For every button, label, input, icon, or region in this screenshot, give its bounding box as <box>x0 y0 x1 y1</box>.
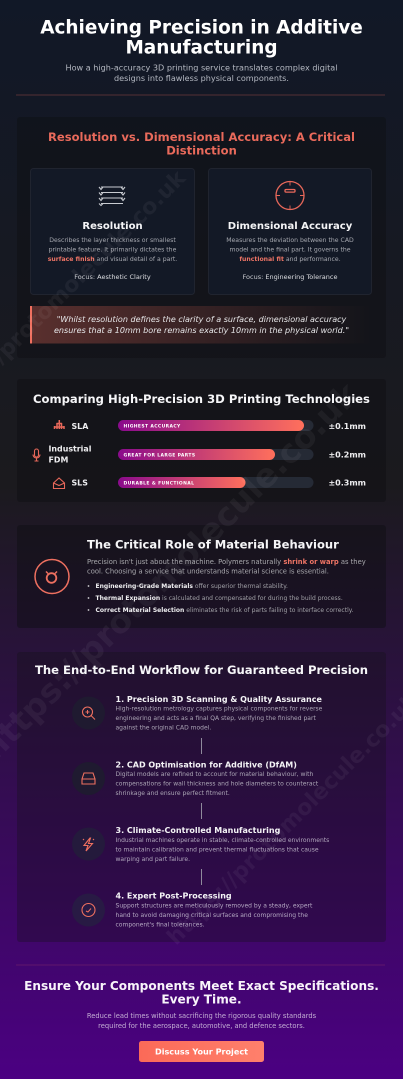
panel heading: Distinction <box>166 144 237 158</box>
icon: material ring <box>35 560 69 594</box>
step 4: component's final tolerances. <box>116 922 205 928</box>
focus label: Focus: Aesthetic Clarity <box>74 273 151 281</box>
panel: technology comparison <box>17 379 386 502</box>
row: SLA: HIGHEST ACCURACY <box>124 424 181 430</box>
panel: material behaviour <box>17 525 386 628</box>
step 2: compensations for wall thickness and hole diameters to counteract <box>116 780 319 788</box>
bullet list <box>88 583 353 614</box>
row: SLA <box>54 420 366 431</box>
row: SLA: SLA <box>72 422 89 431</box>
callout quote: "Whilst resolution defines the clarity of a surface, dimensional accuracy <box>57 315 346 324</box>
step 3: 3. Climate-Controlled Manufacturing <box>116 826 281 835</box>
CTA text: required for the aerospace, automotive, and defence sectors. <box>98 1022 305 1030</box>
icon: tray <box>72 762 105 795</box>
step 1: 1. Precision 3D Scanning & Quality Assurance <box>116 695 322 704</box>
row: SLS: DURABLE & FUNCTIONAL <box>124 480 194 486</box>
card heading: Dimensional Accuracy <box>228 221 353 232</box>
panel heading: The Critical Role of Material Behaviour <box>87 538 339 552</box>
card text: Describes the layer thickness or smallest <box>49 237 176 244</box>
card text: functional fit and performance. <box>239 256 341 263</box>
step 1: engineering and acts as a final QA step, verifying the finished part <box>116 715 316 722</box>
icon: printer <box>54 420 64 429</box>
step 1: against the original CAD model. <box>116 724 211 732</box>
card heading: Resolution <box>82 221 143 232</box>
callout quote <box>30 306 372 344</box>
button <box>139 1041 264 1062</box>
row: SLS <box>54 477 366 488</box>
card text: model and the final part. It governs the <box>229 246 351 254</box>
callout quote: ensures that a 10mm bore remains exactly 10mm in the physical world." <box>54 326 349 335</box>
watermark <box>0 165 403 950</box>
card text: printable feature. It primarily dictates the <box>49 246 177 254</box>
icon: check circle <box>72 894 105 926</box>
CTA text: Reduce lead times without sacrificing the rigorous quality standards <box>87 1012 316 1020</box>
step 4: 4. Expert Post-Processing <box>116 892 232 900</box>
intro text: Precision isn't just about the machine. Polymers naturally shrink or warp as they <box>87 558 366 566</box>
row: SLS: ±0.3mm <box>328 478 366 488</box>
step 3: to maintain calibration and prevent thermal fluctuations that cause <box>116 846 319 854</box>
row: Industrial FDM: ±0.2mm <box>328 450 366 460</box>
step 2: 2. CAD Optimisation for Additive (DfAM) <box>116 760 297 770</box>
header <box>40 18 363 83</box>
subtitle: designs into flawless physical components. <box>114 73 289 83</box>
row: Industrial FDM: Industrial <box>48 444 91 454</box>
intro text: cool. Choosing a service that understands material science is essential. <box>87 568 329 576</box>
call to action <box>24 979 379 1062</box>
step 2 <box>72 760 319 797</box>
bullet list: Thermal Expansion is calculated and compensated for during the build process. <box>96 595 343 602</box>
panel heading: Resolution vs. Dimensional Accuracy: A Critical <box>48 130 355 144</box>
step 3: warping and part failure. <box>116 856 190 863</box>
icon: microphone <box>33 449 40 461</box>
bullet list: Engineering-Grade Materials offer superior thermal stability. <box>96 583 288 590</box>
step 4 <box>72 892 313 928</box>
row: SLA: ±0.1mm <box>328 422 366 431</box>
panel: resolution vs dimensional accuracy <box>17 117 386 358</box>
icon: layers <box>99 187 125 206</box>
icon: lightning <box>72 828 105 860</box>
CTA heading: Every Time. <box>161 992 242 1006</box>
row: Industrial FDM: GREAT FOR LARGE PARTS <box>124 452 196 458</box>
icon: magnifier <box>72 696 105 730</box>
row: SLS: SLS <box>72 478 88 488</box>
card text: Measures the deviation between the CAD <box>226 237 354 244</box>
step 2: Digital models are refined to account for material behaviour, with <box>116 771 313 778</box>
icon: gauge <box>276 182 304 210</box>
icon: tray <box>54 478 64 488</box>
step 3 <box>72 826 329 863</box>
title: Manufacturing <box>125 38 278 58</box>
card text: surface finish and visual detail of a part. <box>48 256 177 263</box>
subtitle: How a high-accuracy 3D printing service translates complex digital <box>65 62 338 72</box>
row: Industrial FDM <box>33 444 366 464</box>
card: resolution <box>30 168 194 294</box>
panel heading: Comparing High-Precision 3D Printing Technologies <box>33 392 370 406</box>
button: Discuss Your Project <box>155 1046 248 1056</box>
panel heading: The End-to-End Workflow for Guaranteed Precision <box>35 663 368 677</box>
step 1 <box>72 695 323 732</box>
step 4: Support structures are meticulously removed by a steady, expert <box>116 902 312 910</box>
step 1: High-resolution metrology captures physical components for reverse <box>116 706 322 712</box>
focus label: Focus: Engineering Tolerance <box>243 273 337 281</box>
step 4: hand to avoid damaging critical surfaces and compromising the <box>116 912 308 919</box>
step 3: Industrial machines operate in stable, climate-controlled environments <box>116 837 329 844</box>
CTA heading: Ensure Your Components Meet Exact Specifications. <box>24 979 379 993</box>
step 2: shrinkage and ensure perfect fitment. <box>116 790 230 797</box>
card: dimensional accuracy <box>208 168 372 294</box>
panel: workflow <box>17 652 386 942</box>
title: Achieving Precision in Additive <box>40 18 363 38</box>
bullet list: Correct Material Selection eliminates the risk of parts failing to interface correctly. <box>96 607 353 614</box>
row: Industrial FDM: FDM <box>48 456 68 464</box>
